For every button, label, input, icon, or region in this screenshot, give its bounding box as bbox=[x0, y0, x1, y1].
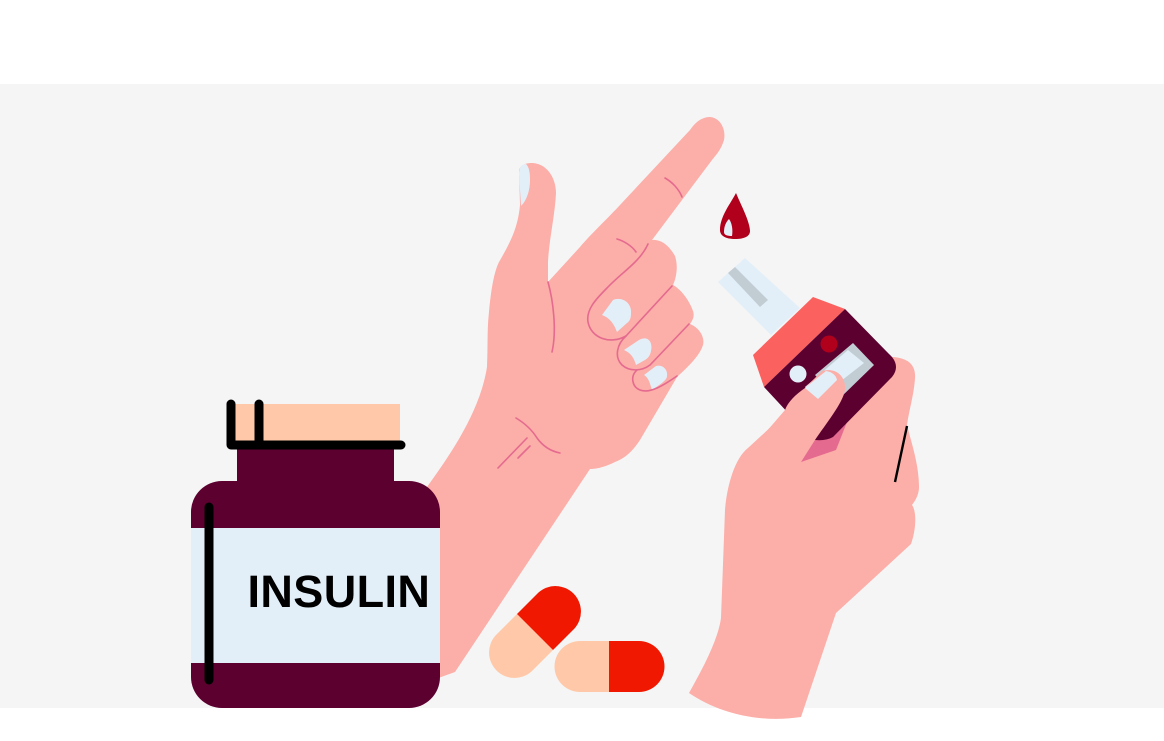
finger nails bbox=[602, 299, 667, 390]
meter screen bbox=[815, 343, 874, 400]
thumb nail bbox=[805, 371, 837, 399]
meter buttons bbox=[820, 336, 838, 352]
bottle label bbox=[191, 528, 440, 663]
label text: INSULIN bbox=[248, 566, 430, 617]
meter coral cap bbox=[753, 297, 845, 387]
hand silhouette bbox=[400, 117, 724, 690]
diagonal pill bbox=[489, 586, 581, 678]
pink shadow bbox=[801, 422, 847, 462]
holding hand with glucose meter bbox=[689, 258, 919, 719]
palm silhouette bbox=[689, 356, 919, 719]
test strip contact bbox=[728, 267, 768, 307]
pointing hand bbox=[400, 117, 724, 690]
bottle neck bbox=[237, 445, 394, 485]
thumb bbox=[735, 370, 845, 500]
black outline strokes bbox=[209, 404, 401, 680]
bottle cap bbox=[235, 404, 400, 445]
horizontal pill bbox=[554, 641, 664, 692]
hand crease lines bbox=[498, 178, 689, 468]
thumb nail bbox=[519, 164, 530, 206]
hand mark line bbox=[895, 426, 907, 482]
blood drop bbox=[720, 193, 750, 239]
test strip bbox=[718, 258, 800, 335]
meter body bbox=[764, 309, 896, 440]
insulin bottle bbox=[191, 404, 440, 708]
bottle body bbox=[191, 481, 440, 708]
